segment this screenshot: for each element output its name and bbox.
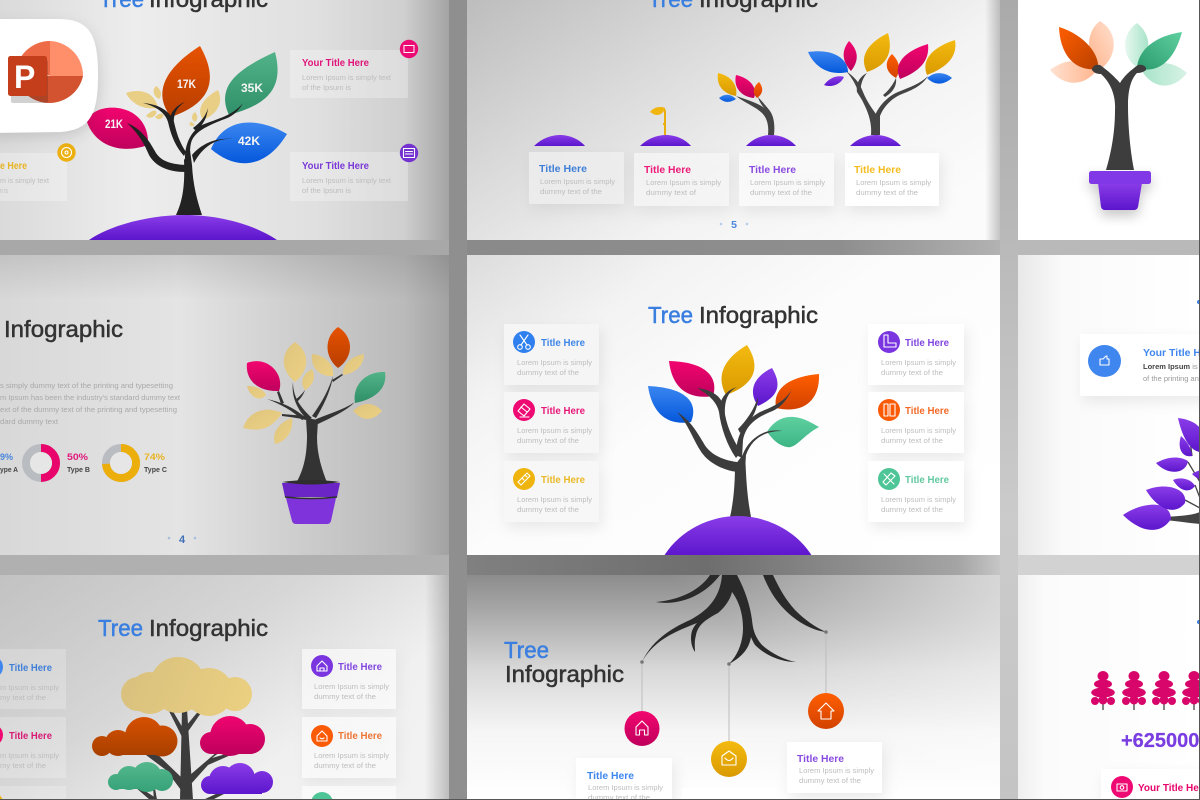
card text: n is xyxy=(0,186,8,195)
stat B label xyxy=(67,452,90,474)
title dot xyxy=(1197,300,1200,304)
title: Tree xyxy=(648,302,693,328)
card 1 xyxy=(529,152,624,204)
stage 4: full tree xyxy=(808,33,955,146)
left cards xyxy=(0,649,66,800)
icon: ruler xyxy=(513,468,535,490)
card A: Title Here xyxy=(587,771,634,782)
card: pink: Title Here xyxy=(9,731,52,742)
leaf: yellow xyxy=(722,345,754,395)
panel: slide middle right, cropped purple tree xyxy=(1018,255,1200,555)
card C xyxy=(787,742,882,793)
card text: m is simply text xyxy=(0,176,50,185)
big number: +625000 xyxy=(1121,730,1199,752)
card: blue: Title Here xyxy=(9,663,52,674)
leaves xyxy=(243,342,382,444)
card: purple xyxy=(302,649,396,709)
card 4: dummy text of the xyxy=(856,188,918,197)
card text: of the Ipsum is xyxy=(302,83,351,92)
title: Infographic xyxy=(149,615,268,641)
card: crossed tools xyxy=(868,461,964,522)
card text: of the Ipsum is xyxy=(302,186,351,195)
value labels: 17K xyxy=(177,79,197,91)
pictogram trees xyxy=(1091,671,1200,710)
leaf: blue xyxy=(648,386,693,423)
card: orange: Title Here xyxy=(338,731,382,742)
branches xyxy=(135,708,233,800)
card: eraser: Lorem Ipsum is simply xyxy=(517,426,592,435)
marker: orange home xyxy=(808,693,844,729)
stat C label: 74% xyxy=(144,452,166,463)
icon: eraser xyxy=(513,399,535,421)
card 3 xyxy=(739,153,834,206)
panel: slide lower center, roots xyxy=(467,575,1000,800)
right cards xyxy=(302,649,396,800)
card: crossed tools: Title Here xyxy=(905,475,949,486)
title: Infographic xyxy=(4,316,123,342)
card 2 xyxy=(634,153,729,206)
paragraph: dard dummy text xyxy=(0,417,59,426)
pine 1 xyxy=(1091,671,1115,710)
card 4: Title Here xyxy=(854,165,901,176)
card: orange: Lorem Ipsum is simply xyxy=(314,751,389,760)
card: pink xyxy=(0,717,66,778)
page number: 5 xyxy=(731,219,737,231)
stat B label: Type B xyxy=(67,467,90,474)
page number: 4 xyxy=(179,534,186,546)
panel: slide top middle, growth stages xyxy=(467,0,1000,240)
stat A label: ype A xyxy=(0,467,18,474)
panel: slide lower right, tree count xyxy=(1018,575,1200,800)
icon: scissors xyxy=(513,331,535,353)
tree trunk and branches xyxy=(127,102,243,215)
paragraph: ext of the dummy text of the printing and typesetting xyxy=(0,405,177,414)
stage 1: seed hill xyxy=(534,135,585,146)
card: orange xyxy=(302,717,396,778)
card: set square: Title Here xyxy=(905,338,949,349)
card 2: dummy text of xyxy=(646,188,697,197)
tree with value leaves xyxy=(87,46,287,240)
card: blue xyxy=(0,649,66,709)
donut C 74% xyxy=(106,448,136,478)
card text xyxy=(302,74,391,92)
card: lower right xyxy=(290,144,418,201)
accent leaves xyxy=(247,327,385,403)
card C: dummy text of the xyxy=(799,776,861,785)
paragraph: m Ipsum has been the industry's standard dummy text xyxy=(0,393,181,402)
card title: e Here xyxy=(0,161,27,172)
card: green xyxy=(302,786,396,800)
marker: yellow home xyxy=(711,741,747,777)
card 2: Title Here xyxy=(644,165,691,176)
card: set square: dummy text of the xyxy=(881,368,943,377)
page number xyxy=(168,534,196,546)
hill xyxy=(89,215,277,240)
card: ruler: dummy text of the xyxy=(517,505,579,514)
purple tree xyxy=(1123,418,1200,530)
card: scissors: dummy text of the xyxy=(517,368,579,377)
card 3: Lorem Ipsum is simply xyxy=(750,178,825,187)
card: set square: Lorem Ipsum is simply xyxy=(881,358,956,367)
stat C label: Type C xyxy=(144,467,167,474)
title dot xyxy=(1197,620,1200,624)
potted tree xyxy=(243,327,385,524)
info card xyxy=(1080,334,1200,396)
leaves: orange and green xyxy=(1059,27,1182,70)
leaf: orange 17K xyxy=(162,46,210,117)
card: scissors xyxy=(504,324,599,385)
card: yellow xyxy=(0,786,66,800)
powerpoint circle xyxy=(16,41,83,103)
card: blue: m Ipsum is simply xyxy=(0,683,59,692)
icon: crossed tools xyxy=(878,468,900,490)
cloud: purple xyxy=(201,763,273,794)
cloud: pink xyxy=(200,716,265,756)
card: tools: Title Here xyxy=(905,406,949,417)
panel: slide top left, tree with values xyxy=(0,0,449,240)
card: crossed tools: dummy text of the xyxy=(881,505,943,514)
card: tools: Lorem Ipsum is simply xyxy=(881,426,956,435)
cloud: tan top xyxy=(121,657,252,716)
card text: Lorem Ipsum is simply text xyxy=(302,176,392,185)
leaf: green xyxy=(767,417,819,447)
leaf: pink 21K xyxy=(87,108,148,149)
card: set square xyxy=(868,324,964,385)
card xyxy=(1101,769,1200,800)
hill xyxy=(664,516,812,556)
panel: slide middle left, potted tree with donuts xyxy=(0,255,449,555)
card: eraser xyxy=(504,392,599,453)
donut stats xyxy=(0,448,167,478)
card: left, cropped xyxy=(0,143,76,201)
card text xyxy=(302,178,391,194)
title xyxy=(99,0,268,12)
leaves: tan accents xyxy=(126,86,220,126)
card 4 xyxy=(845,153,939,206)
cloud tree xyxy=(92,657,273,800)
trunk xyxy=(1092,65,1146,170)
card text xyxy=(0,178,49,193)
card: ruler xyxy=(504,461,599,522)
leaf: purple xyxy=(753,368,777,406)
stage 3: young tree xyxy=(718,73,796,146)
card 4: Lorem Ipsum is simply xyxy=(856,178,931,187)
card text: Lorem Ipsum is simply text xyxy=(302,73,392,82)
card 1: dummy text of the xyxy=(540,187,602,196)
page number xyxy=(720,221,748,228)
value labels: 21K xyxy=(105,119,124,131)
stat A label: 9% xyxy=(0,452,14,463)
cloud: orange xyxy=(92,717,178,756)
paragraph: s simply dummy text of the printing and typesetting xyxy=(0,381,173,390)
panel: slide lower left, cloud tree xyxy=(0,575,449,800)
powerpoint letter tile: P xyxy=(14,59,35,95)
card 3: Title Here xyxy=(749,165,796,176)
stat B label: 50% xyxy=(67,452,89,463)
pot xyxy=(282,480,340,524)
card: purple: Lorem Ipsum is simply xyxy=(314,682,389,691)
card: scissors: Lorem Ipsum is simply xyxy=(517,358,592,367)
card: blue: my text of the xyxy=(0,693,46,702)
icon: panel xyxy=(400,144,418,162)
card title: Your Title Here xyxy=(302,58,369,69)
card: tools: dummy text of the xyxy=(881,436,943,445)
card: eraser: dummy text of the xyxy=(517,436,579,445)
card: tools xyxy=(868,392,964,453)
stat A label xyxy=(0,452,18,474)
trunk and branches xyxy=(677,387,792,517)
PowerPoint badge xyxy=(0,19,100,138)
card: pink: m Ipsum is simply xyxy=(0,751,59,760)
card 1: Title Here xyxy=(539,164,587,175)
root dots xyxy=(640,630,828,666)
marker: pink home xyxy=(624,711,660,746)
stage cards xyxy=(529,152,939,206)
leaf: orange xyxy=(776,374,819,410)
card: eraser: Title Here xyxy=(541,406,585,417)
left cards xyxy=(504,324,599,522)
cloud: green xyxy=(108,762,173,792)
right cards xyxy=(868,324,964,522)
pine 3 xyxy=(1152,671,1176,710)
card 2: Lorem Ipsum is simply xyxy=(646,178,721,187)
leaves: pale back xyxy=(1050,21,1187,86)
pine 2 xyxy=(1122,671,1146,710)
card 1: Lorem Ipsum is simply xyxy=(540,177,615,186)
card: top right xyxy=(290,40,418,98)
card: scissors: Title Here xyxy=(541,338,585,349)
card title: Your Title Here xyxy=(302,161,369,172)
stage 2: sprout xyxy=(640,107,691,146)
donut B 50% xyxy=(26,448,56,478)
icon: set square xyxy=(878,331,900,353)
main tree xyxy=(648,345,819,556)
pine 4 xyxy=(1182,671,1200,710)
hanging lines xyxy=(642,632,826,741)
value labels: 42K xyxy=(238,136,261,148)
card: ruler: Title Here xyxy=(541,475,585,486)
title: Infographic xyxy=(699,302,818,328)
card B xyxy=(682,788,776,800)
card A xyxy=(576,758,672,800)
leaf: pink xyxy=(669,361,714,397)
powerpoint square xyxy=(11,60,48,103)
card: pink: my text of the xyxy=(0,761,46,770)
card: ruler: Lorem Ipsum is simply xyxy=(517,495,592,504)
card 3: dummy text of the xyxy=(750,188,812,197)
title: Infographic xyxy=(505,661,624,687)
title: Tree xyxy=(98,615,143,641)
icon: tools xyxy=(878,399,900,421)
pot xyxy=(1089,171,1151,210)
stat C label xyxy=(144,452,167,474)
panel: slide center, main tree infographic xyxy=(467,255,1000,556)
title xyxy=(504,637,624,687)
title xyxy=(648,0,818,12)
card: purple: dummy text of the xyxy=(314,692,376,701)
icon: target xyxy=(57,143,76,162)
card C: Title Here xyxy=(797,754,844,765)
branches and trunk xyxy=(267,374,355,485)
roots xyxy=(642,575,826,664)
value labels: 35K xyxy=(241,83,264,95)
card: purple: Title Here xyxy=(338,662,382,673)
icon: keyboard xyxy=(400,40,418,58)
panel: slide top right, potted tree xyxy=(1018,0,1200,240)
leaf: blue 42K xyxy=(211,122,287,163)
card: orange: dummy text of the xyxy=(314,761,376,770)
card A: Lorem Ipsum is simply xyxy=(588,783,663,792)
title xyxy=(648,302,818,328)
title: Tree xyxy=(504,637,549,663)
value labels xyxy=(105,79,264,148)
leaf: green 35K xyxy=(225,52,278,115)
card: crossed tools: Lorem Ipsum is simply xyxy=(881,495,956,504)
card C: Lorem Ipsum is simply xyxy=(799,766,874,775)
title xyxy=(98,615,268,641)
paragraph xyxy=(0,381,181,426)
icon: blue circle xyxy=(1088,345,1121,377)
